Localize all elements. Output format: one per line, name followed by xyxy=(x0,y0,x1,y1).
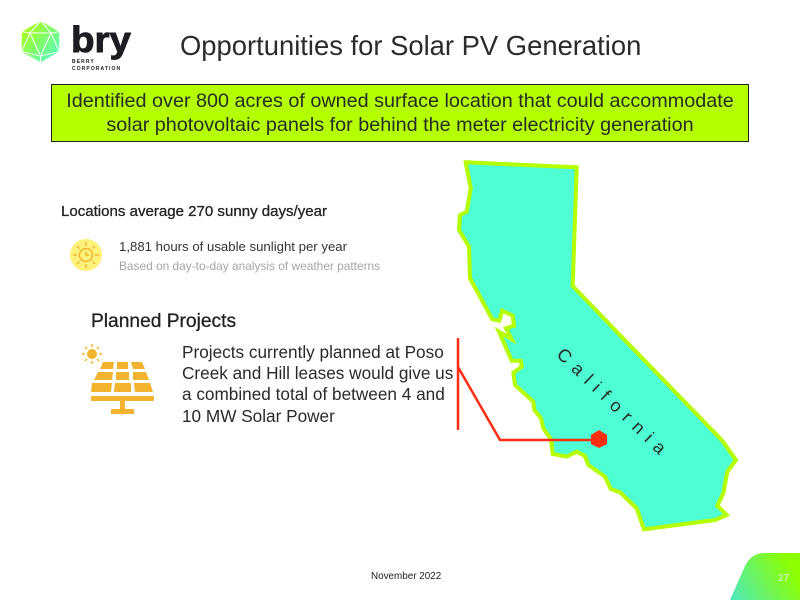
title: Opportunities for Solar PV Generation xyxy=(180,30,641,61)
text: sunny days: Locations average 270 sunny days/year xyxy=(61,203,327,220)
text block: project description xyxy=(182,342,453,426)
callout: identified acreage: solar photovoltaic panels for behind the meter electricity generation xyxy=(106,114,694,136)
logo: Berry Corporation xyxy=(22,19,132,72)
footer date: November 2022 xyxy=(371,571,441,582)
text block: project description: Projects currently planned at Poso xyxy=(182,342,444,362)
text block: project description: Creek and Hill leases would give us xyxy=(182,363,453,383)
label: California: California xyxy=(553,344,675,463)
footer tab with page number: 27 xyxy=(778,573,790,584)
icon: solar panel xyxy=(82,344,154,414)
footer tab with page number xyxy=(730,553,800,600)
logo: Berry Corporation: BERRY xyxy=(72,59,95,65)
text block: project description: a combined total of between 4 and xyxy=(182,384,445,404)
heading: planned projects: Planned Projects xyxy=(91,311,236,332)
callout: identified acreage: Identified over 800 acres of owned surface location that could accommodate xyxy=(66,90,734,112)
icon: sun clock xyxy=(70,239,102,271)
callout: identified acreage xyxy=(51,84,749,142)
logo: Berry Corporation: bry xyxy=(71,19,131,60)
text: weather analysis note: Based on day-to-day analysis of weather patterns xyxy=(119,259,380,273)
text: usable sunlight: 1,881 hours of usable sunlight per year xyxy=(119,239,347,254)
logo: Berry Corporation: CORPORATION xyxy=(72,66,121,72)
text block: project description: 10 MW Solar Power xyxy=(182,406,335,426)
